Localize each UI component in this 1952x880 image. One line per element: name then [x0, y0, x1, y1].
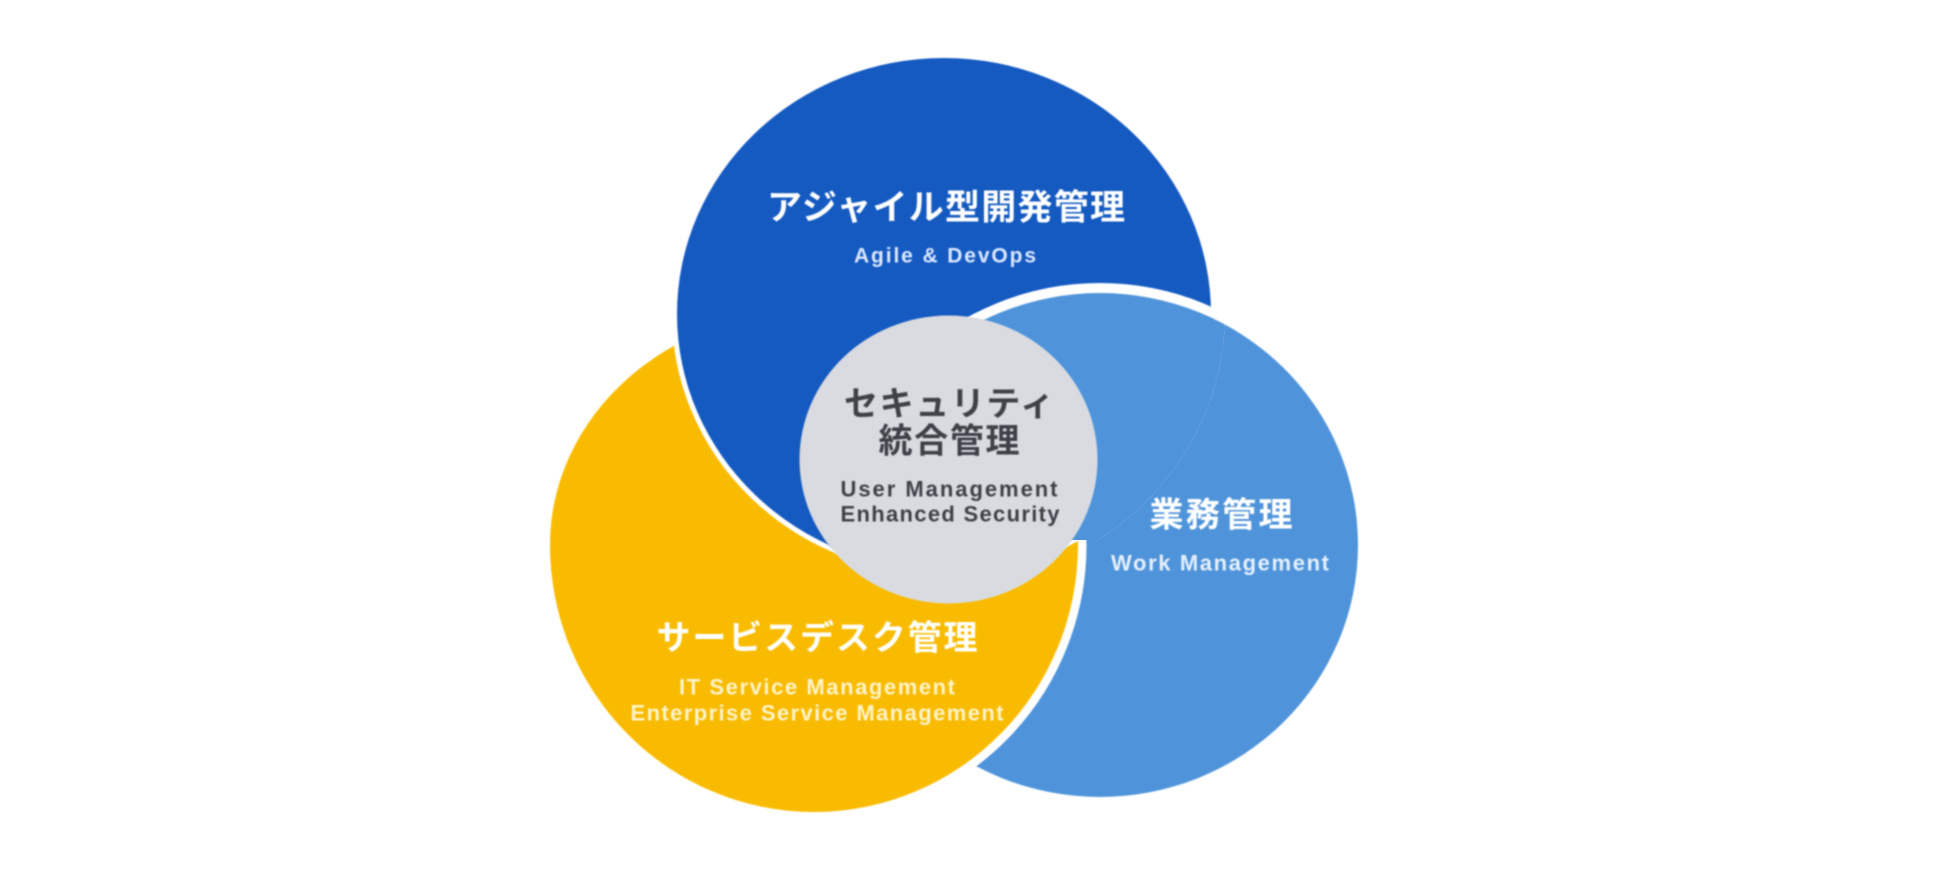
text block: service desk	[630, 610, 1004, 726]
subheading: work management: Work Management	[1111, 550, 1330, 576]
subheading: IT service management: IT Service Management	[679, 674, 956, 700]
text block: work management	[1111, 488, 1330, 576]
subheading: enterprise service management: Enterprise Service Management	[630, 700, 1004, 726]
heading: service desk: サービスデスク管理	[656, 610, 978, 660]
text block: security	[840, 376, 1060, 526]
subheading: user management: User Management	[840, 476, 1058, 502]
heading: security line 2: 統合管理	[878, 414, 1020, 462]
circle: security integrated management	[800, 316, 1098, 604]
diagram: overlapping product areas	[548, 56, 1359, 814]
circle: service desk management	[550, 310, 1078, 812]
overlap: work management over agile circle	[966, 282, 1225, 540]
subheading: enhanced security: Enhanced Security	[840, 502, 1060, 526]
circle: agile and devops management	[677, 58, 1211, 570]
circle: work management	[842, 293, 1358, 797]
heading: agile: アジャイル型開発管理	[767, 180, 1125, 230]
text block: agile	[767, 180, 1125, 268]
heading: security line 1: セキュリティ	[844, 376, 1054, 426]
heading: work management: 業務管理	[1150, 488, 1292, 536]
subheading: agile: Agile & DevOps	[854, 244, 1036, 268]
